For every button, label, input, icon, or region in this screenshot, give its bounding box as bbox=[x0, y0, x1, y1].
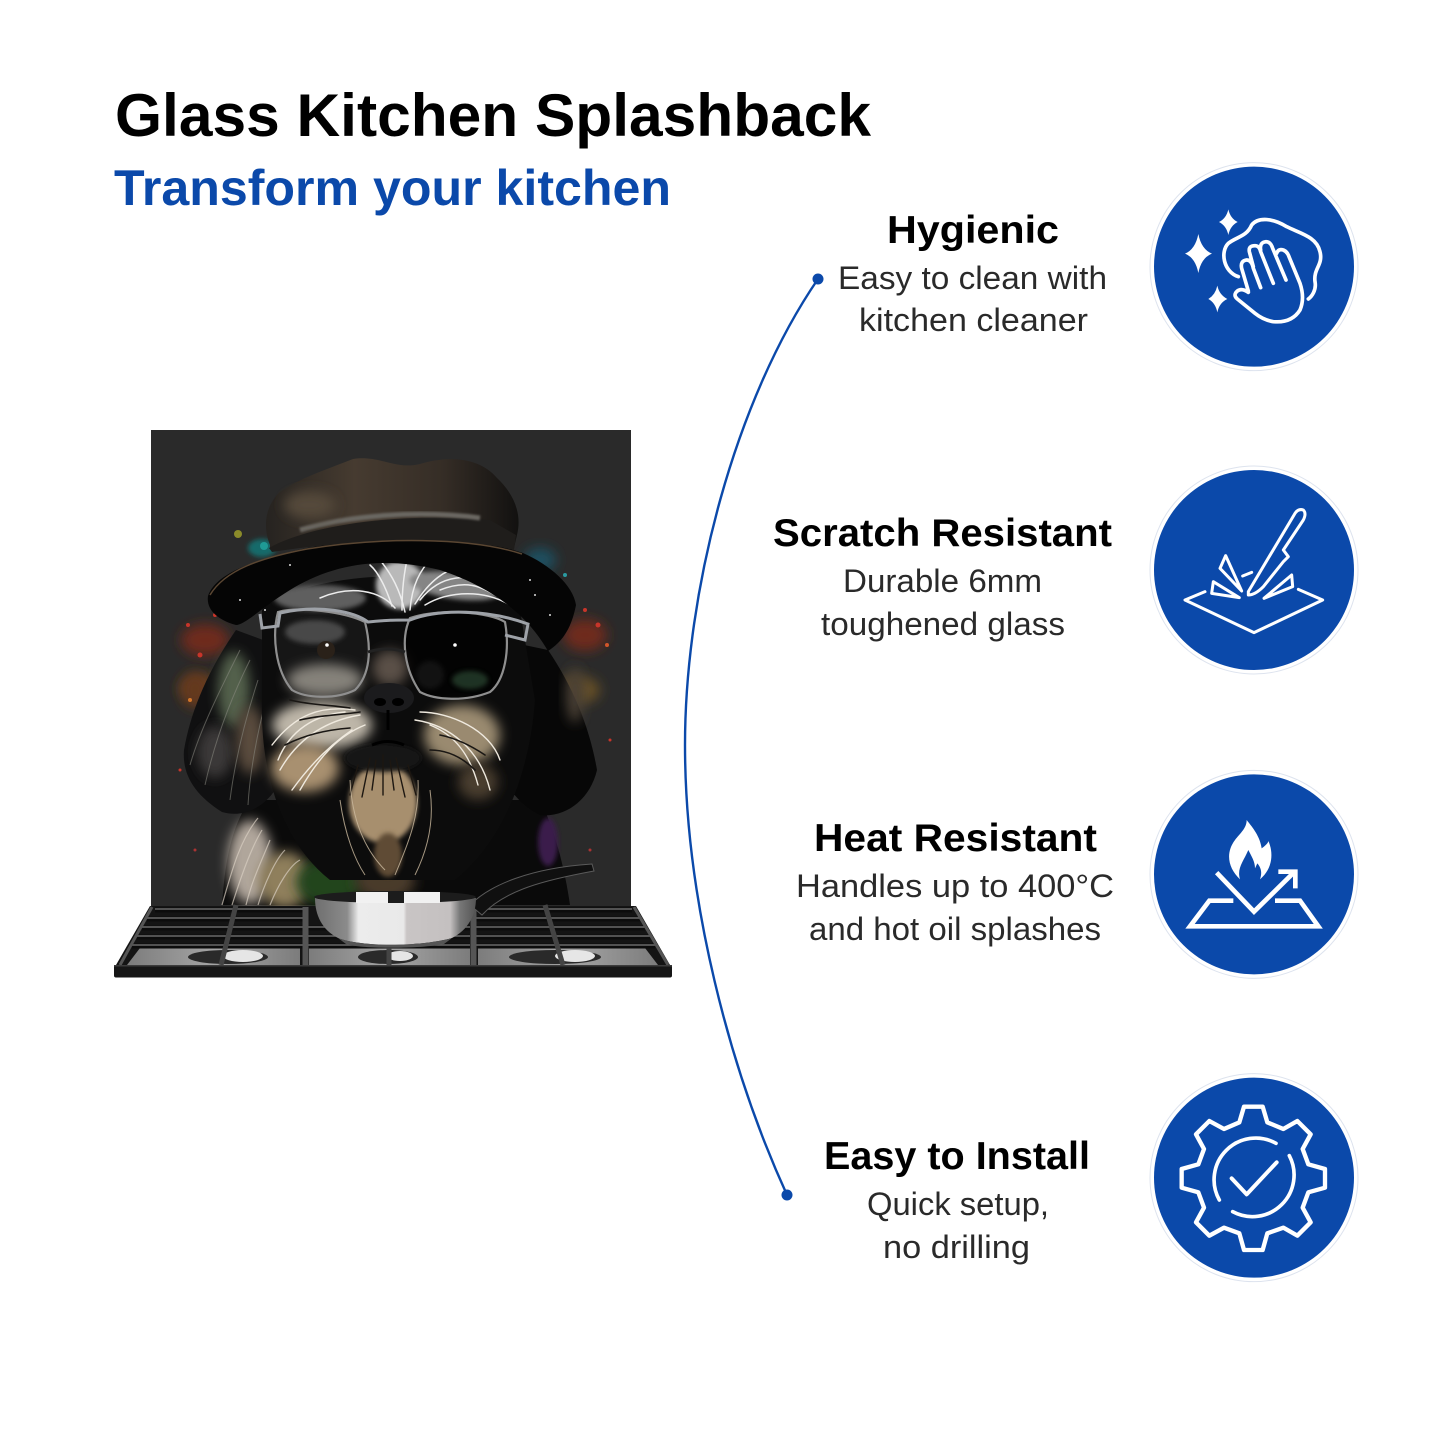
feature: easy to install text bbox=[824, 1135, 1090, 1265]
subtitle: Transform your kitchen bbox=[114, 160, 671, 216]
glasses bbox=[260, 609, 528, 699]
stainless hob surface bbox=[127, 948, 658, 965]
icon: hand wiping with sparkles bbox=[1150, 163, 1358, 371]
feature: hygienic text: Hygienic bbox=[887, 209, 1059, 252]
paint splatter bbox=[178, 530, 612, 852]
hat bbox=[208, 458, 576, 651]
fur seen around lenses bbox=[287, 664, 363, 696]
feature: heat resistant text: Heat Resistant bbox=[814, 817, 1097, 860]
feature: heat resistant text: and hot oil splashes bbox=[809, 911, 1101, 947]
connector curve with end dots bbox=[685, 274, 824, 1200]
title: Glass Kitchen Splashback bbox=[115, 82, 872, 149]
nose bbox=[364, 683, 414, 713]
muzzle fur bbox=[272, 701, 372, 749]
dog body and chest fur bbox=[222, 800, 570, 908]
grate rails bbox=[120, 907, 668, 965]
beard bbox=[349, 763, 417, 843]
product image: dog splashback above a gas hob bbox=[114, 430, 672, 978]
feature: scratch resistant text: toughened glass bbox=[821, 606, 1065, 642]
gas hob bbox=[114, 905, 672, 978]
feature: scratch resistant text bbox=[773, 512, 1112, 642]
feature: hygienic text bbox=[838, 209, 1107, 338]
frying pan bbox=[314, 864, 594, 948]
feature: scratch resistant text: Scratch Resistant bbox=[773, 512, 1112, 555]
feature: heat resistant text: Handles up to 400°C bbox=[796, 868, 1114, 904]
feature: easy to install text: no drilling bbox=[883, 1229, 1030, 1265]
icon: gear with check mark bbox=[1150, 1074, 1358, 1282]
splashback panel bbox=[151, 430, 631, 920]
hob body bbox=[116, 906, 670, 965]
feature: heat resistant text bbox=[796, 817, 1114, 947]
dog head bbox=[262, 556, 535, 880]
feature: hygienic text: Easy to clean with bbox=[838, 260, 1107, 296]
cross bars bbox=[221, 905, 563, 965]
feature: easy to install text: Easy to Install bbox=[824, 1135, 1090, 1178]
feature: scratch resistant text: Durable 6mm bbox=[843, 563, 1042, 599]
icon: flame over surface with arrow bbox=[1150, 770, 1358, 978]
icon: knife scratching glass bbox=[1150, 466, 1358, 674]
forehead fur bbox=[376, 561, 424, 609]
front edge bbox=[114, 965, 672, 978]
feature: easy to install text: Quick setup, bbox=[867, 1186, 1049, 1222]
dog ears bbox=[184, 630, 597, 815]
feature: hygienic text: kitchen cleaner bbox=[859, 302, 1088, 338]
burners bbox=[188, 950, 601, 964]
